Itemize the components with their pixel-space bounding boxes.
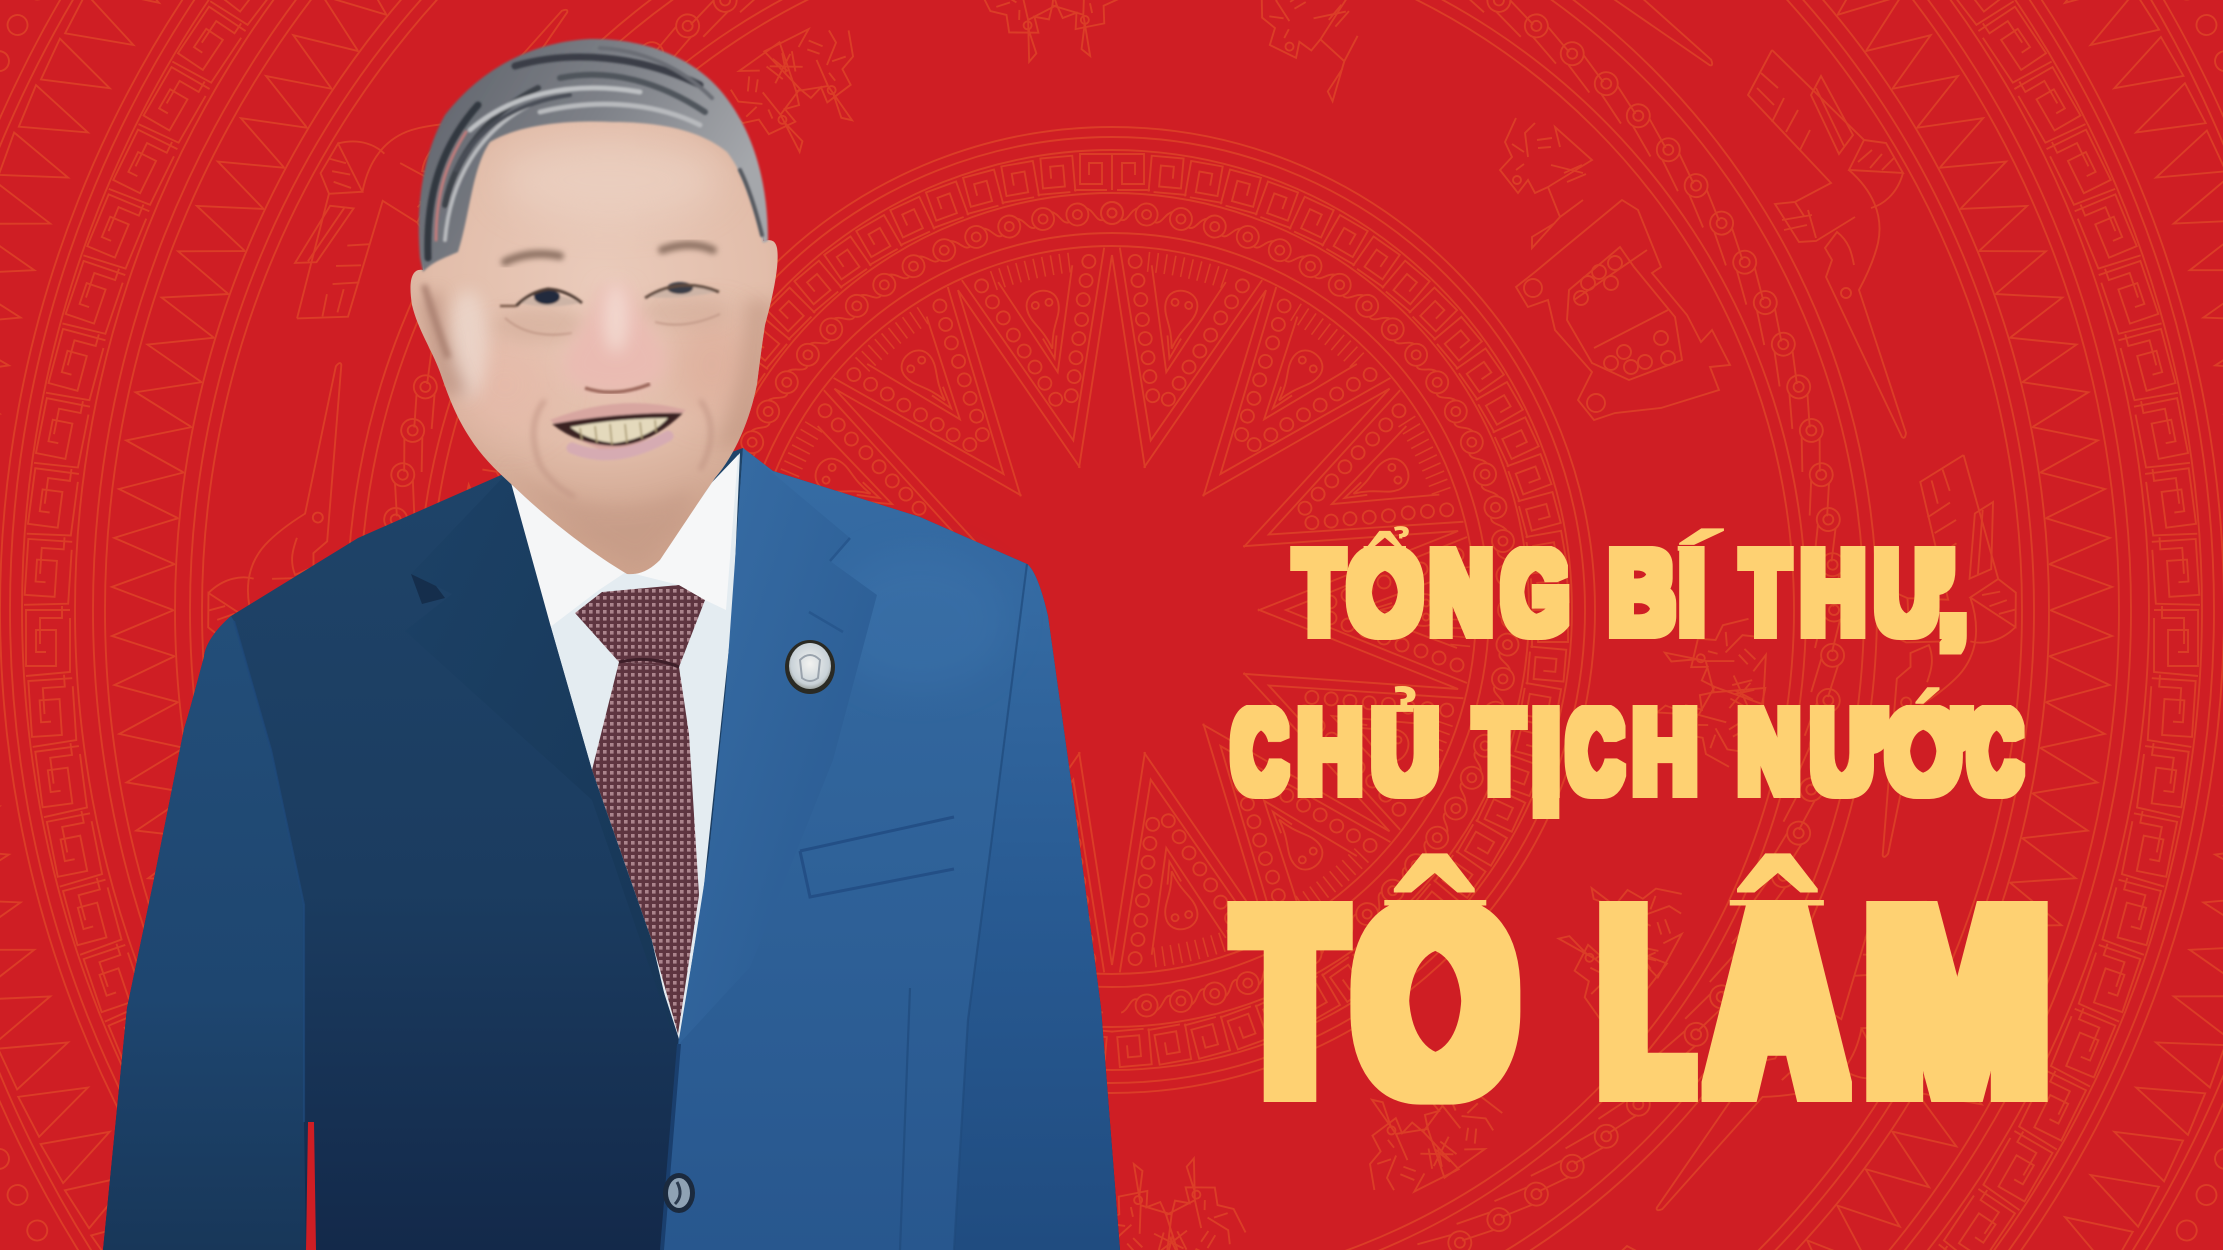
line 2: Chủ tịch nước: H	[1298, 686, 1362, 818]
line 1: Tổng Bí thư,: Í	[1670, 527, 1725, 659]
line 2: Chủ tịch nước: C	[1969, 686, 2021, 818]
face and neck	[410, 50, 778, 574]
line 2: Chủ tịch nước	[1232, 685, 2021, 818]
shirt	[508, 453, 740, 1039]
line 2: Chủ tịch nước: C	[1567, 686, 1622, 818]
lapel edge	[809, 538, 850, 632]
line 2: Chủ tịch nước: C	[1232, 686, 1286, 818]
lapel pin	[785, 640, 835, 694]
line 2: Chủ tịch nước: Ủ	[1372, 685, 1439, 818]
line 2: Chủ tịch nước: T	[1475, 686, 1523, 818]
mouth	[550, 403, 686, 456]
ear shading	[424, 285, 448, 358]
jacket front edge	[662, 1044, 679, 1250]
left lapel	[405, 472, 676, 1044]
right front of jacket	[662, 448, 1027, 1250]
head	[410, 39, 778, 574]
line 1: Tổng Bí thư,: H	[1801, 527, 1865, 659]
hair	[419, 39, 768, 272]
line 1: Tổng Bí thư,: ,	[1938, 543, 1968, 655]
line 3: name Tô Lâm: T	[1240, 854, 1340, 1148]
line 1: Tổng Bí thư,: N	[1430, 527, 1493, 659]
lapel notch	[411, 574, 445, 604]
title: job titles and name	[1232, 525, 2048, 1148]
line 1: Tổng Bí thư,: Ổ	[1348, 526, 1422, 659]
gap between arm and body	[306, 1122, 316, 1250]
line 3: name Tô Lâm: L	[1605, 854, 1688, 1148]
line 2: Chủ tịch nước: N	[1738, 686, 1800, 818]
breast pocket	[800, 817, 954, 897]
line 3: name Tô Lâm: M	[1866, 854, 2048, 1148]
suit jacket base	[103, 448, 1120, 1250]
line 1: Tổng Bí thư,: B	[1609, 527, 1674, 659]
nose	[563, 283, 667, 393]
eyebrows	[505, 245, 713, 262]
jacket button	[663, 1173, 695, 1213]
sleeve seams	[234, 564, 1027, 1250]
shirt collar left	[508, 481, 626, 631]
tie knot	[575, 585, 705, 667]
line 3: name Tô Lâm: Ô	[1357, 854, 1514, 1148]
line 2: Chủ tịch nước: Ư	[1811, 686, 1883, 818]
smile folds	[534, 400, 711, 497]
shoulder light	[830, 550, 1010, 690]
left sleeve	[103, 616, 306, 1250]
line 2: Chủ tịch nước: H	[1633, 686, 1697, 818]
right sleeve	[954, 564, 1120, 1250]
line 3: name Tô Lâm: Â	[1696, 851, 1858, 1145]
line 2: Chủ tịch nước: Ủ	[1372, 685, 1439, 818]
tie blade	[592, 662, 699, 1034]
right eye	[645, 282, 720, 325]
line 1: Tổng Bí thư,: T	[1742, 527, 1789, 659]
shirt collar right	[635, 455, 738, 610]
line 3: name Tô Lâm: Ô	[1347, 851, 1522, 1145]
line 2: Chủ tịch nước: Ị	[1531, 686, 1561, 818]
facial shading clipped to head	[417, 143, 771, 520]
line 2: Chủ tịch nước: Ư	[1811, 686, 1883, 818]
line 1: Tổng Bí thư,: Ư	[1874, 527, 1949, 659]
line 1: Tổng Bí thư,	[1295, 525, 1968, 659]
line 1: Tổng Bí thư,: Ư	[1874, 527, 1949, 659]
line 1: Tổng Bí thư,: G	[1502, 527, 1569, 659]
portrait: man in navy suit	[103, 39, 1120, 1250]
left eye	[500, 289, 582, 335]
line 3: name Tô Lâm: Â	[1712, 854, 1842, 1148]
right lapel	[679, 448, 877, 1044]
hair strands	[428, 48, 762, 258]
line 2: Chủ tịch nước: Ớ	[1886, 686, 1968, 818]
line 2: Chủ tịch nước: Ớ	[1886, 686, 1968, 818]
line 1: Tổng Bí thư,: Ổ	[1342, 525, 1428, 658]
line 1: Tổng Bí thư,: T	[1295, 527, 1343, 659]
line 1: Tổng Bí thư,: Í	[1679, 527, 1707, 659]
line 3: name Tô Lâm	[1227, 853, 2048, 1105]
